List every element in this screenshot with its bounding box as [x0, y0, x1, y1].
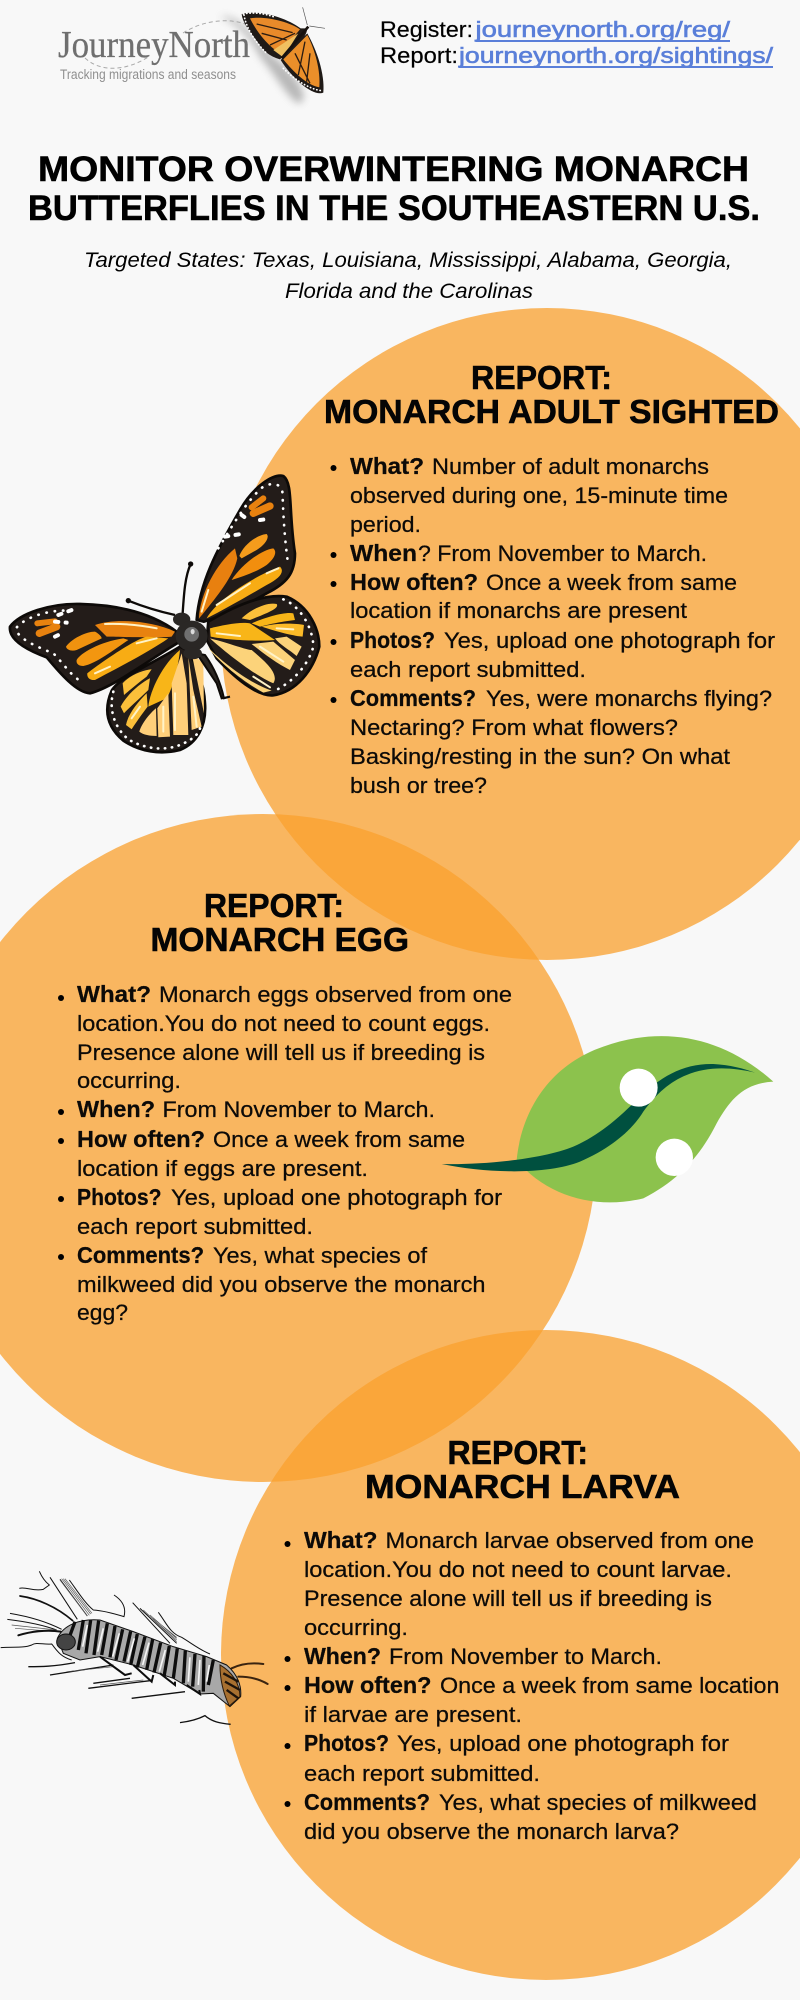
list: larva details: if larvae are present. [304, 1702, 522, 1727]
list: egg details: milkweed did you observe the monarch [77, 1272, 486, 1297]
logo shadow [220, 16, 304, 103]
heading: egg [150, 887, 409, 958]
list: egg details: Once a week from same [213, 1127, 465, 1152]
panel: larva [284, 1434, 780, 1844]
list: adult details: What? [350, 453, 424, 479]
list: egg details: Yes, upload one photograph for [171, 1185, 503, 1210]
caterpillar filaments [18, 1596, 268, 1684]
heading: adult: REPORT: [471, 359, 612, 396]
list: adult details: each report submitted. [350, 657, 586, 682]
heading: larva: REPORT: [448, 1434, 588, 1471]
list: egg details: What? [77, 981, 151, 1007]
icon: monarch caterpillar [1, 1571, 268, 1724]
logo dashed flight path [85, 21, 245, 68]
heading: adult [324, 359, 779, 430]
butterfly margin spots [16, 484, 313, 748]
subtitle: targeted states [84, 249, 732, 303]
list: adult details: When [350, 540, 417, 566]
butterfly antennae, body [126, 561, 230, 698]
list: adult details: Photos? [350, 627, 435, 653]
list: adult details: Comments? [350, 685, 476, 711]
subtitle: targeted states: Targeted States: Texas, Louisiana, Mississippi, Alabama, Georgia, [84, 249, 732, 272]
heading: egg: REPORT: [204, 887, 344, 924]
icon: leaf with eggs [442, 1036, 773, 1202]
list: egg details: each report submitted. [77, 1214, 313, 1239]
subtitle: targeted states: Florida and the Carolinas [285, 280, 534, 303]
list: egg details: egg? [77, 1300, 128, 1325]
list: adult details: Basking/resting in the sun? On what [350, 744, 731, 769]
list: larva details: Yes, what species of milkweed [439, 1790, 757, 1815]
list: egg details [58, 981, 512, 1325]
list: egg details: location if eggs are present. [77, 1156, 368, 1181]
butterfly wing cells [66, 534, 304, 737]
list: egg details: How often? [77, 1126, 205, 1152]
heading: adult: MONARCH ADULT SIGHTED [324, 393, 779, 430]
list: egg details: Comments? [77, 1242, 204, 1268]
caterpillar twigs [1, 1571, 231, 1724]
list: egg details: Monarch eggs observed from one [159, 982, 512, 1007]
list: egg details: Photos? [77, 1184, 162, 1210]
report link: journeynorth.org/sightings/ [458, 43, 774, 68]
list: egg details: location.You do not need to count eggs. [77, 1011, 490, 1036]
register link: Register: [380, 17, 473, 42]
heading: larva: MONARCH LARVA [365, 1468, 680, 1505]
list: larva details [284, 1527, 780, 1844]
caterpillar stripes [68, 1620, 213, 1694]
butterfly dark tip patches [37, 498, 270, 633]
logo butterfly [242, 7, 325, 93]
list: adult details: observed during one, 15-minute time [350, 483, 728, 508]
list: adult details: period. [350, 512, 421, 537]
panel: adult sighted [324, 359, 779, 798]
list: adult details: location if monarchs are present [350, 598, 688, 623]
list: adult details: Nectaring? From what flowers? [350, 715, 678, 740]
list: adult details [330, 453, 776, 798]
title [28, 150, 760, 228]
title: MONITOR OVERWINTERING MONARCH [38, 150, 749, 189]
register link [380, 17, 731, 42]
heading: egg: MONARCH EGG [150, 921, 409, 958]
logo tagline: Tracking migrations and seasons [60, 67, 236, 82]
list: larva details: Photos? [304, 1730, 389, 1756]
logo: Journey North [58, 7, 325, 103]
report link: Report: [380, 43, 458, 68]
list: larva details: did you observe the monarch larva? [304, 1819, 679, 1844]
caterpillar head [57, 1634, 75, 1650]
caterpillar white bands [83, 1625, 209, 1685]
butterfly highlights [95, 568, 293, 732]
list: larva details: How often? [304, 1672, 432, 1698]
list: adult details: Yes, upload one photograph for [444, 628, 776, 653]
register link: journeynorth.org/reg/ [474, 17, 731, 42]
list: egg details: Yes, what species of [213, 1243, 428, 1268]
logo wordmark: JourneyNorth [58, 24, 250, 66]
links: register and report [380, 17, 774, 68]
circle: adult panel [221, 308, 800, 960]
list: egg details: occurring. [77, 1068, 181, 1093]
icon: monarch butterfly [10, 476, 319, 752]
caterpillar tail [220, 1665, 240, 1706]
list: egg details: When? [77, 1096, 155, 1122]
list: adult details: Number of adult monarchs [432, 454, 709, 479]
list: larva details: Presence alone will tell us if breeding is [304, 1586, 712, 1611]
list: larva details: Comments? [304, 1789, 430, 1815]
list: adult details: bush or tree? [350, 773, 487, 798]
heading: larva [365, 1434, 680, 1505]
list: larva details: occurring. [304, 1615, 408, 1640]
list: adult details: Yes, were monarchs flying? [486, 686, 772, 711]
list: larva details: From November to March. [389, 1644, 662, 1669]
list: adult details: ? From November to March. [418, 541, 707, 566]
list: adult details: Once a week from same [486, 570, 737, 595]
circle: egg panel [0, 814, 597, 1482]
title: BUTTERFLIES IN THE SOUTHEASTERN U.S. [28, 189, 760, 228]
list: larva details: Monarch larvae observed from one [386, 1528, 754, 1553]
list: larva details: When? [304, 1643, 381, 1669]
report link [380, 43, 774, 68]
list: larva details: What? [304, 1527, 378, 1553]
list: egg details: From November to March. [162, 1097, 435, 1122]
list: larva details: Yes, upload one photograph for [397, 1731, 730, 1756]
list: larva details: each report submitted. [304, 1761, 540, 1786]
list: adult details: How often? [350, 569, 478, 595]
caterpillar body [57, 1620, 241, 1707]
list: egg details: Presence alone will tell us if breeding is [77, 1040, 485, 1065]
list: larva details: location.You do not need to count larvae. [304, 1557, 732, 1582]
panel: egg [58, 887, 512, 1325]
list: larva details: Once a week from same location [440, 1673, 780, 1698]
circle: larva panel [221, 1330, 800, 1980]
